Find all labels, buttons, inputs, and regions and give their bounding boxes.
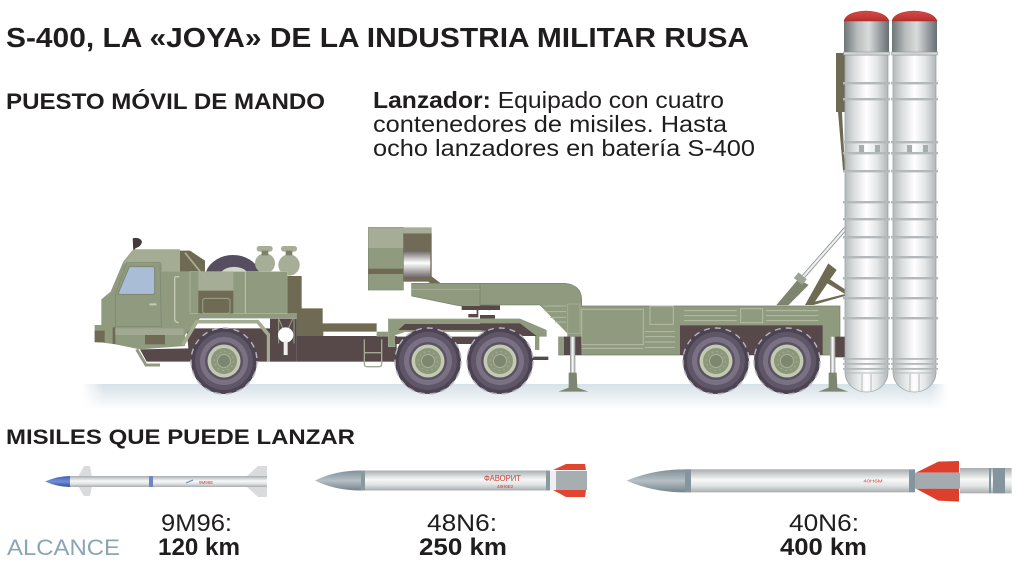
ground shadow [82,384,948,408]
label: 9M96 range: 9M96: [161,510,232,537]
text block: lanzador [373,87,755,161]
label: 9M96 range: 120 km [158,534,240,561]
trailer section [480,228,848,392]
missile 40N6 [627,461,1012,502]
missile 9M96: 9M96E [199,480,213,485]
text block: lanzador: ocho lanzadores en batería S-400 [373,135,755,161]
label: 48N6 range: 250 km [419,534,507,561]
label: 40N6 range: 400 km [780,534,867,561]
upper strap behind containers [836,53,845,170]
range label: ALCANCE [7,535,120,560]
missile 48N6 [315,464,587,497]
missile 48N6: 48H6E2 [497,484,514,489]
label: 48N6 range [419,510,507,561]
label: 40N6 range: 40N6: [789,510,859,537]
heading: puesto móvil de mando: PUESTO MÓVIL DE MANDO [6,89,325,114]
label: 40N6 range [780,510,867,561]
text block: lanzador: Lanzador: Equipado con cuatro [373,87,724,113]
title: S-400, LA «JOYA» DE LA INDUSTRIA MILITAR RUSA [6,22,749,53]
truck front section [95,238,490,367]
label: 48N6 range: 48N6: [427,510,497,537]
gooseneck and cable reel [368,227,490,317]
wheels [191,328,820,394]
missile 48N6: ФАВОРИТ [484,474,521,483]
missile containers [843,11,938,392]
launcher vehicle illustration [95,11,938,394]
heading: misiles: MISILES QUE PUEDE LANZAR [6,425,356,449]
missile 40N6: 40H6M [863,478,883,483]
missile 9M96 [45,466,267,497]
label: 9M96 range [158,510,240,561]
text block: lanzador: contenedores de misiles. Hasta [373,111,727,137]
